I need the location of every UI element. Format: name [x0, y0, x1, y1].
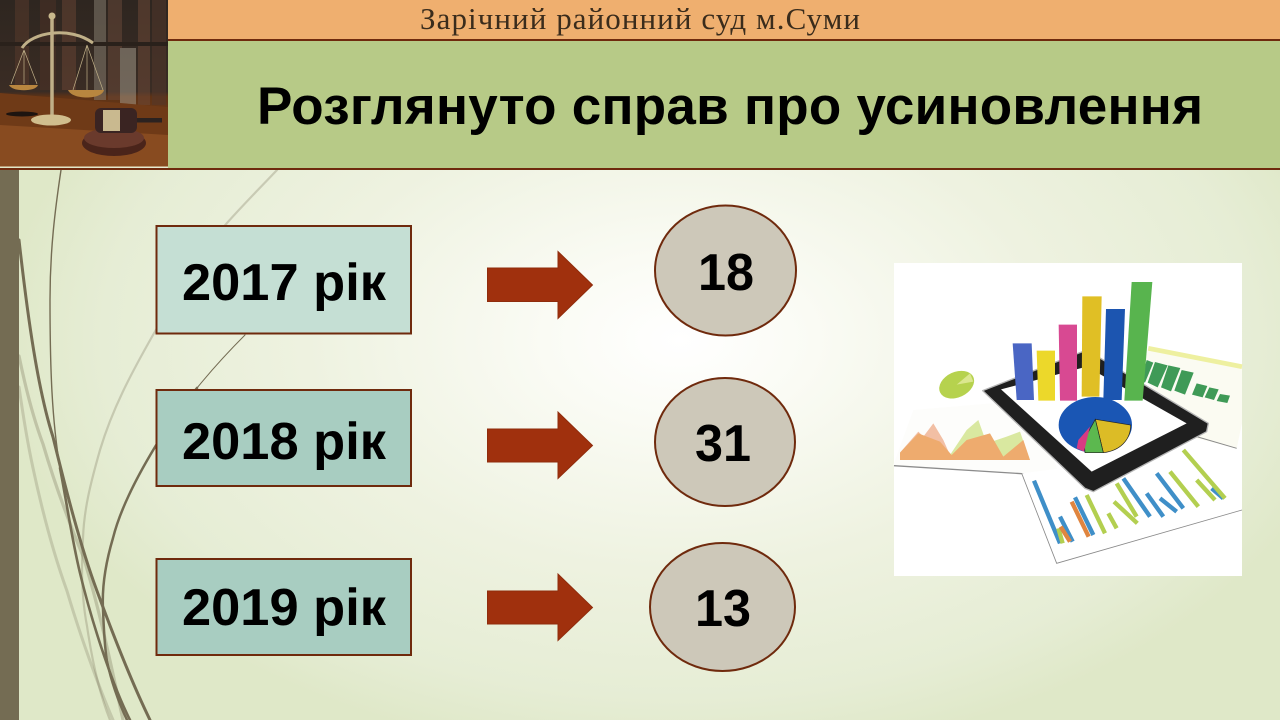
arrow 2017: [488, 252, 592, 318]
court name: Зарічний районний суд м.Суми: [420, 1, 860, 36]
back sheet left: [893, 400, 1058, 476]
year box 2019: [156, 559, 411, 655]
value 18: 18: [698, 244, 754, 302]
tablet: [983, 350, 1208, 492]
small pie sheet: [935, 365, 979, 404]
year box 2018: [156, 390, 411, 486]
title: Розглянуто справ про усиновлення: [257, 77, 1203, 136]
header: court name band: [168, 0, 1280, 40]
3d pie: [1059, 397, 1132, 453]
arrow 2018: [488, 412, 592, 478]
decorative curved wisps: [19, 170, 277, 720]
arrow 2019: [488, 574, 592, 640]
row: 2018: [156, 378, 795, 506]
left sidebar stripe: [0, 170, 19, 720]
row: 2017: [156, 206, 796, 336]
3d bars: [1013, 343, 1034, 400]
scales: [11, 15, 103, 118]
header: title band: [0, 39, 1280, 170]
value 18: [655, 206, 796, 336]
row: 2019: [156, 543, 795, 671]
front sheet: [1022, 457, 1242, 563]
picture: tablet with charts: [893, 263, 1242, 576]
year box 2017: 2017 рік: [182, 254, 387, 312]
back sheet right: [1143, 347, 1242, 448]
year box 2018: 2018 рік: [182, 413, 387, 471]
gavel: [82, 130, 146, 156]
value 13: [650, 543, 795, 671]
value 31: [655, 378, 795, 506]
picture: scales of justice and gavel: [0, 0, 168, 167]
value 31: 31: [695, 415, 751, 473]
value 13: 13: [695, 580, 751, 638]
year box 2017: [156, 226, 411, 334]
year box 2019: 2019 рік: [182, 579, 387, 637]
